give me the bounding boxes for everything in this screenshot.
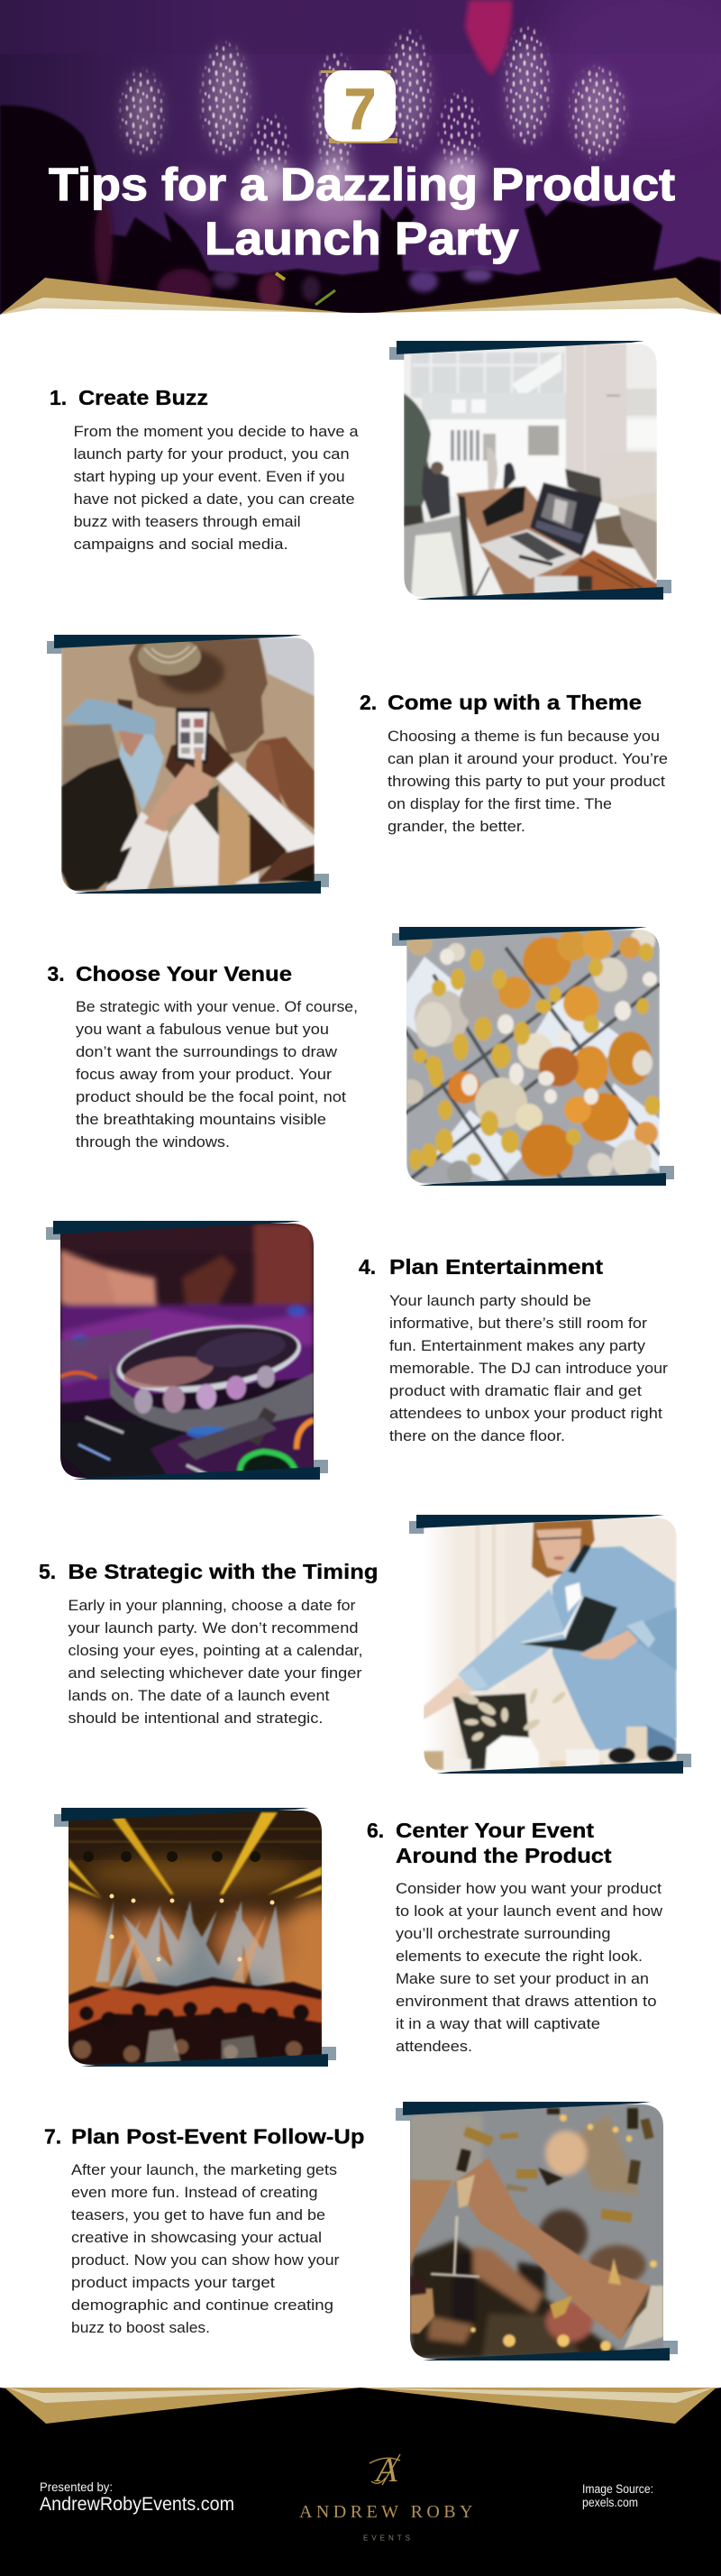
- tip 3 text: you want a fabulous venue but you: [76, 1022, 329, 1038]
- tip 2 text: can plan it around your product. You’re: [388, 751, 668, 767]
- title: [49, 159, 675, 264]
- tip 7 text: demographic and continue creating: [71, 2297, 333, 2314]
- tip 1 text: have not picked a date, you can create: [74, 491, 355, 508]
- presented by: AndrewRobyEvents.com: [40, 2494, 234, 2515]
- tip 7 text: Plan Post-Event Follow-Up: [71, 2124, 364, 2148]
- logo: ANDREW ROBY: [299, 2502, 472, 2522]
- header gold fold left: [0, 278, 360, 315]
- tip 6 photo: concert lights: [54, 1808, 336, 2067]
- tip 5 text: Early in your planning, choose a date for: [68, 1598, 356, 1614]
- footer white edge: [0, 2380, 721, 2393]
- tip 3 text: focus away from your product. Your: [76, 1067, 333, 1083]
- tip 1 text: From the moment you decide to have a: [74, 424, 359, 440]
- tip 2 text: on display for the first time. The: [388, 796, 612, 812]
- tip 6 text: you’ll orchestrate surrounding: [396, 1926, 611, 1942]
- tip 1 text: launch party for your product, you can: [74, 446, 350, 463]
- crowd silhouette: [0, 105, 721, 316]
- tip 5 text: and selecting whichever date your finger: [68, 1665, 362, 1682]
- image source: [582, 2482, 653, 2509]
- tip 7 photo: champagne toast with confetti: [396, 2102, 678, 2361]
- tip 4 text: product with dramatic flair and get: [389, 1383, 642, 1399]
- tip 7 text: even more fun. Instead of creating: [71, 2185, 317, 2201]
- tip 7 text: buzz to boost sales.: [71, 2320, 210, 2336]
- tip 4 text: attendees to unbox your product right: [389, 1406, 662, 1422]
- presented by: [40, 2480, 234, 2515]
- tip 5 text: should be intentional and strategic.: [68, 1710, 323, 1727]
- tip 6 text: attendees.: [396, 2039, 472, 2055]
- tip 2 text: throwing this party to put your product: [388, 774, 665, 790]
- title: Launch Party: [205, 213, 519, 264]
- tip 5 text: your launch party. We don’t recommend: [68, 1620, 359, 1636]
- tip 7 text: 7.: [44, 2124, 61, 2148]
- image source: Image Source:: [582, 2482, 653, 2496]
- tip 2 text: [360, 691, 668, 835]
- tip 6 text: [367, 1819, 662, 2055]
- tip 6 text: Consider how you want your product: [396, 1881, 662, 1897]
- tip 2 text: grander, the better.: [388, 819, 525, 835]
- number badge: 7: [344, 77, 376, 142]
- logo: EVENTS: [363, 2534, 410, 2543]
- tip 2 text: 2.: [360, 691, 377, 714]
- tip 4 text: 4.: [359, 1255, 376, 1279]
- tip 7 text: teasers, you get to have fun and be: [71, 2207, 325, 2223]
- tip 2 text: Come up with a Theme: [388, 691, 642, 714]
- tip 2 photo: two people with phone: [47, 635, 329, 894]
- tip 5 text: lands on. The date of a launch event: [68, 1688, 330, 1704]
- tip 3 text: 3.: [47, 962, 65, 985]
- footer gold fold right: [360, 2388, 716, 2424]
- tip 4 text: informative, but there’s still room for: [389, 1316, 648, 1332]
- tip 3 text: [47, 962, 358, 1150]
- tip 7 text: After your launch, the marketing gets: [71, 2162, 337, 2178]
- header white edge: [0, 308, 721, 325]
- tip 6 text: Center Your Event: [396, 1819, 594, 1842]
- tip 2 text: Choosing a theme is fun because you: [388, 729, 660, 745]
- tip 6 text: elements to execute the right look.: [396, 1948, 643, 1965]
- logo: A: [373, 2452, 397, 2489]
- tip 6 text: it in a way that will captivate: [396, 2016, 600, 2032]
- tip 4 text: [359, 1255, 669, 1444]
- tip 4 text: Your launch party should be: [389, 1293, 591, 1309]
- tip 6 text: Around the Product: [396, 1844, 612, 1867]
- tip 5 photo: woman with notebook: [409, 1515, 691, 1774]
- tip 3 photo: balloons on ceiling: [388, 921, 674, 1191]
- tip 5 text: closing your eyes, pointing at a calendar,: [68, 1643, 362, 1659]
- tip 6 text: Make sure to set your product in an: [396, 1971, 649, 1987]
- tip 7 text: [44, 2124, 364, 2336]
- tip 4 text: there on the dance floor.: [389, 1428, 565, 1444]
- tip 4 text: fun. Entertainment makes any party: [389, 1338, 646, 1354]
- header gold fold right: [360, 278, 721, 315]
- tip 3 text: Choose Your Venue: [76, 962, 292, 985]
- tip 1 photo: office with laptop: [389, 341, 671, 600]
- tip 1 text: [50, 386, 359, 553]
- presented by: Presented by:: [40, 2480, 113, 2494]
- tip 7 text: product impacts your target: [71, 2275, 275, 2291]
- tip 7 text: product. Now you can show how your: [71, 2252, 340, 2269]
- title: Tips for a Dazzling Product: [49, 159, 675, 210]
- tip 6 text: 6.: [367, 1819, 384, 1842]
- tip 7 text: creative in showcasing your actual: [71, 2230, 322, 2246]
- tip 3 text: product should be the focal point, not: [76, 1089, 346, 1105]
- tip 1 text: Create Buzz: [78, 386, 208, 409]
- header photo: concert fireworks and crowd: [0, 0, 721, 316]
- tip 3 text: Be strategic with your venue. Of course,: [76, 999, 358, 1015]
- logo: [299, 2452, 472, 2543]
- image source: pexels.com: [582, 2496, 638, 2509]
- tip 4 text: Plan Entertainment: [389, 1255, 603, 1279]
- tip 3 text: the breathtaking mountains visible: [76, 1112, 326, 1128]
- tip 3 text: don’t want the surroundings to draw: [76, 1044, 337, 1060]
- tip 4 text: memorable. The DJ can introduce your: [389, 1361, 669, 1377]
- tip 6 text: environment that draws attention to: [396, 1994, 656, 2010]
- tip 3 text: through the windows.: [76, 1134, 230, 1150]
- tip 6 text: to look at your launch event and how: [396, 1903, 662, 1920]
- tip 5 text: [39, 1560, 379, 1727]
- tip 5 text: 5.: [39, 1560, 56, 1583]
- tip 4 photo: DJ turntable: [46, 1221, 328, 1480]
- tip 5 text: Be Strategic with the Timing: [68, 1560, 379, 1583]
- tip 1 text: campaigns and social media.: [74, 536, 288, 553]
- number badge: [321, 70, 397, 143]
- footer black panel: [0, 2388, 721, 2576]
- tip 1 text: start hyping up your event. Even if you: [74, 469, 345, 485]
- footer gold fold left: [5, 2388, 360, 2424]
- tip 1 text: 1.: [50, 386, 67, 409]
- tip 1 text: buzz with teasers through email: [74, 514, 301, 530]
